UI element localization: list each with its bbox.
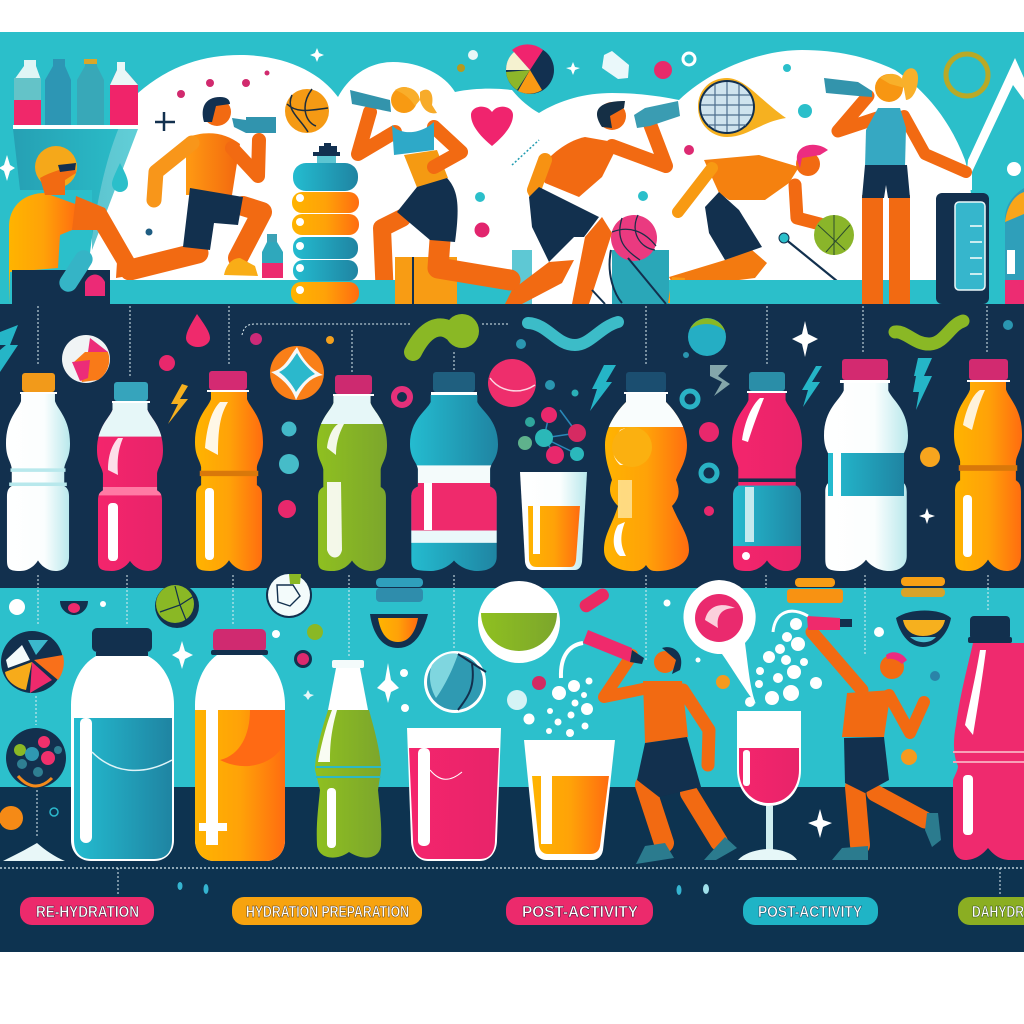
sphere with green liquid xyxy=(478,581,560,663)
seated athlete in cap xyxy=(9,146,136,304)
label: post-activity pink: POST-ACTIVITY xyxy=(522,904,638,921)
bottle: large white with teal label xyxy=(824,359,908,571)
standing woman lunging and drinking xyxy=(350,87,510,304)
heart xyxy=(471,107,513,146)
dotted connectors xyxy=(36,588,988,838)
basketball xyxy=(285,89,329,133)
panel: lower teal band and dark floor xyxy=(0,572,1024,952)
balls row three xyxy=(0,572,486,861)
bottle: blue water large xyxy=(71,628,174,861)
bottle: orange right xyxy=(954,359,1022,571)
label: re-hydration xyxy=(20,897,154,925)
dotted connectors to labels xyxy=(118,868,1000,895)
drinking lunging man xyxy=(116,97,276,278)
horizontal dotted rule xyxy=(0,867,1024,869)
ball: orange with teal gem xyxy=(270,346,324,400)
panel: athletes hydrating xyxy=(0,32,1024,304)
label: post-activity pink xyxy=(506,897,653,925)
big jug xyxy=(291,143,359,304)
bottle: green glass xyxy=(315,660,381,858)
teal lightning bolts xyxy=(590,358,932,411)
yellow ring xyxy=(946,54,988,96)
label: hydration preparation: HYDRATION PREPARATION xyxy=(246,904,409,921)
small bottle by jug xyxy=(262,234,283,278)
shelf with four bottles xyxy=(13,59,138,250)
runner reaching bottle up, right xyxy=(773,611,941,860)
small blue droplets xyxy=(178,882,709,895)
row three small accents xyxy=(60,577,951,838)
bottle: orange large xyxy=(195,629,285,861)
standing woman drinking xyxy=(824,68,966,304)
bottle: orange with magenta cap xyxy=(195,371,263,571)
small floating dots xyxy=(0,48,1021,238)
green peanut xyxy=(413,314,479,352)
bending man drinking xyxy=(505,101,680,304)
dots, rings and stars xyxy=(159,320,1013,524)
runner drinking, left xyxy=(583,630,737,864)
bottle: white and orange blob xyxy=(604,372,689,572)
pink tennis ball xyxy=(488,359,536,407)
label: hydration preparation xyxy=(232,897,422,925)
label: post-activity teal xyxy=(743,897,878,925)
label: dehydration cropped xyxy=(958,897,1024,925)
leaning man with ball xyxy=(668,145,864,303)
speech bubble with pink ball xyxy=(683,580,756,704)
label: re-hydration: RE-HYDRATION xyxy=(36,904,139,921)
water drop xyxy=(112,163,128,192)
colourful ball xyxy=(506,44,554,94)
bottle: green with magenta cap xyxy=(317,375,387,571)
small glass of orange juice xyxy=(520,472,587,570)
floor strip xyxy=(110,280,936,304)
molecule cluster xyxy=(518,407,586,464)
bottle: white with orange cap xyxy=(6,373,70,571)
teal green ball xyxy=(688,318,726,356)
label: post-activity teal: POST-ACTIVITY xyxy=(758,904,862,921)
right white chevron xyxy=(965,58,1024,190)
bottle: pink with blue cap xyxy=(97,382,163,571)
left teal lightning xyxy=(0,325,18,372)
glass: pink juice xyxy=(407,728,501,861)
bottle: blue with pink label xyxy=(410,372,498,571)
wine glass with pink drink xyxy=(737,711,801,860)
cropped bottle at right edge xyxy=(1005,188,1024,304)
ball: pink white orange xyxy=(62,335,110,383)
green squiggle xyxy=(895,321,963,344)
water droplets xyxy=(9,599,884,737)
panel: bottle row xyxy=(0,304,1024,588)
teal squiggle xyxy=(528,322,618,345)
yellow lightning xyxy=(168,384,188,424)
spilling liquid left xyxy=(561,643,583,678)
pink drop xyxy=(186,314,210,347)
glass: orange juice xyxy=(524,740,615,860)
bottle: pink and teal with teal cap xyxy=(732,372,802,571)
bottle: big pink right xyxy=(953,616,1024,860)
tennis racket xyxy=(698,78,786,137)
hydration gauge xyxy=(936,193,989,304)
plus sign xyxy=(155,112,175,131)
white whistle xyxy=(602,51,629,79)
white cloud backdrop xyxy=(87,50,975,280)
pink basketball xyxy=(592,215,666,304)
dotted connectors xyxy=(38,306,988,588)
